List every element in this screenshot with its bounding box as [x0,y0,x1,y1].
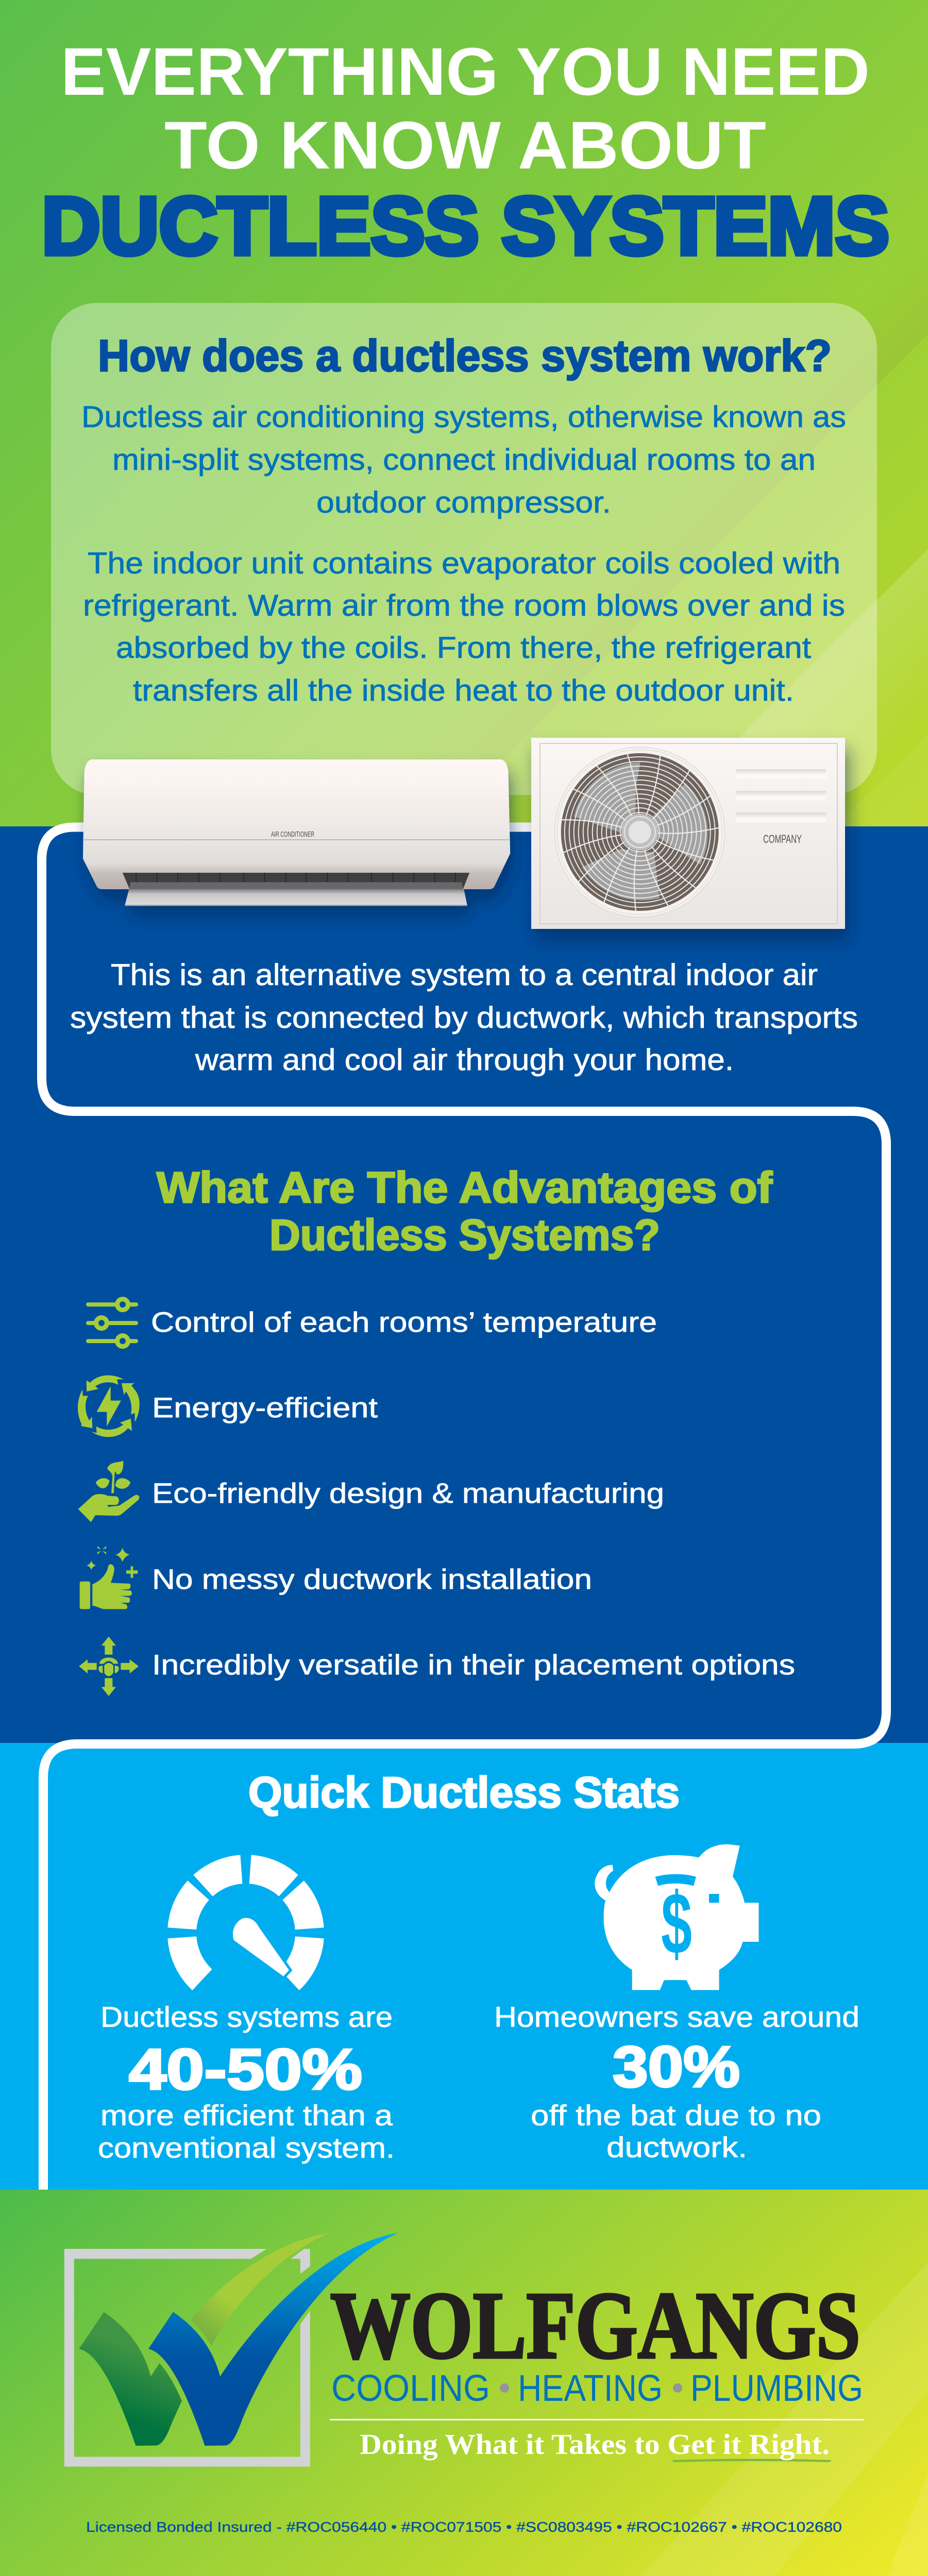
text: definition paragraph: mini-split systems, connect individual rooms to an [112,443,816,477]
heading: quick stats: Quick Ductless Stats [248,1768,680,1817]
stat: savings: off the bat due to no [531,2099,821,2131]
number: 30%: 30% [613,2035,740,2099]
logo services: cooling heating plumbing: HEATING [518,2368,663,2409]
icon: gauge [182,1869,310,1980]
item: no messy ductwork: No messy ductwork installation [152,1563,592,1595]
text: how the indoor unit works: absorbed by the coils. From there, the refrigerant [116,631,811,665]
item: room temperature control: Control of each rooms’ temperature [151,1306,657,1338]
stat: efficiency: more efficient than a [100,2099,393,2131]
tagline: Doing What it Takes to Get it Right. [360,2429,830,2461]
list: advantages [151,1306,795,1681]
text: definition paragraph: outdoor compressor. [316,486,611,519]
icon: thumbs up with sparkles [80,1546,138,1609]
stat: efficiency: conventional system. [98,2131,395,2164]
heading: advantages: Ductless Systems? [269,1211,660,1259]
title [42,33,889,272]
stat: efficiency: Ductless systems are [100,2001,393,2033]
item: energy efficient: Energy-efficient [152,1392,378,1423]
title: EVERYTHING YOU NEED [61,33,870,109]
logo services: cooling heating plumbing: PLUMBING [690,2368,863,2409]
fan [555,747,725,917]
logo services: cooling heating plumbing [331,2368,863,2409]
text: how the indoor unit works: The indoor unit contains evaporator coils cooled with [88,547,840,580]
text: alternative system paragraph: warm and cool air through your home. [195,1043,734,1077]
heading: advantages [157,1163,773,1259]
stat: savings [494,2001,859,2163]
text: alternative system paragraph: This is an alternative system to a central indoor air [111,958,818,992]
icon: piggy bank [595,1844,759,1990]
text: how the indoor unit works: refrigerant. Warm air from the room blows over and is [83,589,845,622]
icon: directional arrows around unit [79,1637,139,1696]
company label: COMPANY [763,833,802,845]
text: how the indoor unit works: transfers all the inside heat to the outdoor unit. [133,674,794,707]
icon: sliders [88,1297,136,1349]
text: alternative system paragraph [70,958,858,1077]
panel: how does a ductless system work [51,303,877,795]
stat: savings: ductwork. [606,2131,747,2163]
icon: energy cycle [78,1376,140,1437]
indoor air conditioner unit [83,759,510,906]
heading: how it works: How does a ductless system work? [98,331,832,381]
dollar sign: $ [661,1875,692,1973]
logo services: cooling heating plumbing: COOLING [331,2368,490,2409]
text: alternative system paragraph: system that is connected by ductwork, which transports [70,1001,858,1035]
stat: efficiency [98,2001,395,2164]
white connector outline snaking around sections [42,827,886,2190]
background: dark blue band [0,826,928,1743]
item: versatile placement: Incredibly versatile in their placement options [152,1649,795,1681]
text: definition paragraph [81,400,846,519]
background: green top band [0,0,928,827]
text: how the indoor unit works [83,547,845,707]
logo mark: W check in frame [64,2233,399,2467]
background: cyan band [0,1743,928,2190]
text: definition paragraph: Ductless air conditioning systems, otherwise known as [81,400,846,434]
heading: advantages: What Are The Advantages of [157,1163,773,1212]
outdoor compressor unit [531,738,845,929]
stat: savings: Homeowners save around [494,2001,859,2033]
icon: plant in hand [78,1461,139,1522]
background: footer gradient band [0,2190,928,2576]
number: 40-50%: 40-50% [129,2037,362,2102]
title: DUCTLESS SYSTEMS [42,181,889,272]
item: eco friendly: Eco-friendly design & manufacturing [152,1477,664,1509]
vent slots [736,769,826,822]
license numbers: Licensed Bonded Insured - #ROC056440 • #ROC071505 • #SC0803495 • #ROC102667 • #ROC102680 [86,2519,842,2535]
label: air conditioner: AIR CONDITIONER [271,830,314,839]
title: TO KNOW ABOUT [164,107,766,183]
